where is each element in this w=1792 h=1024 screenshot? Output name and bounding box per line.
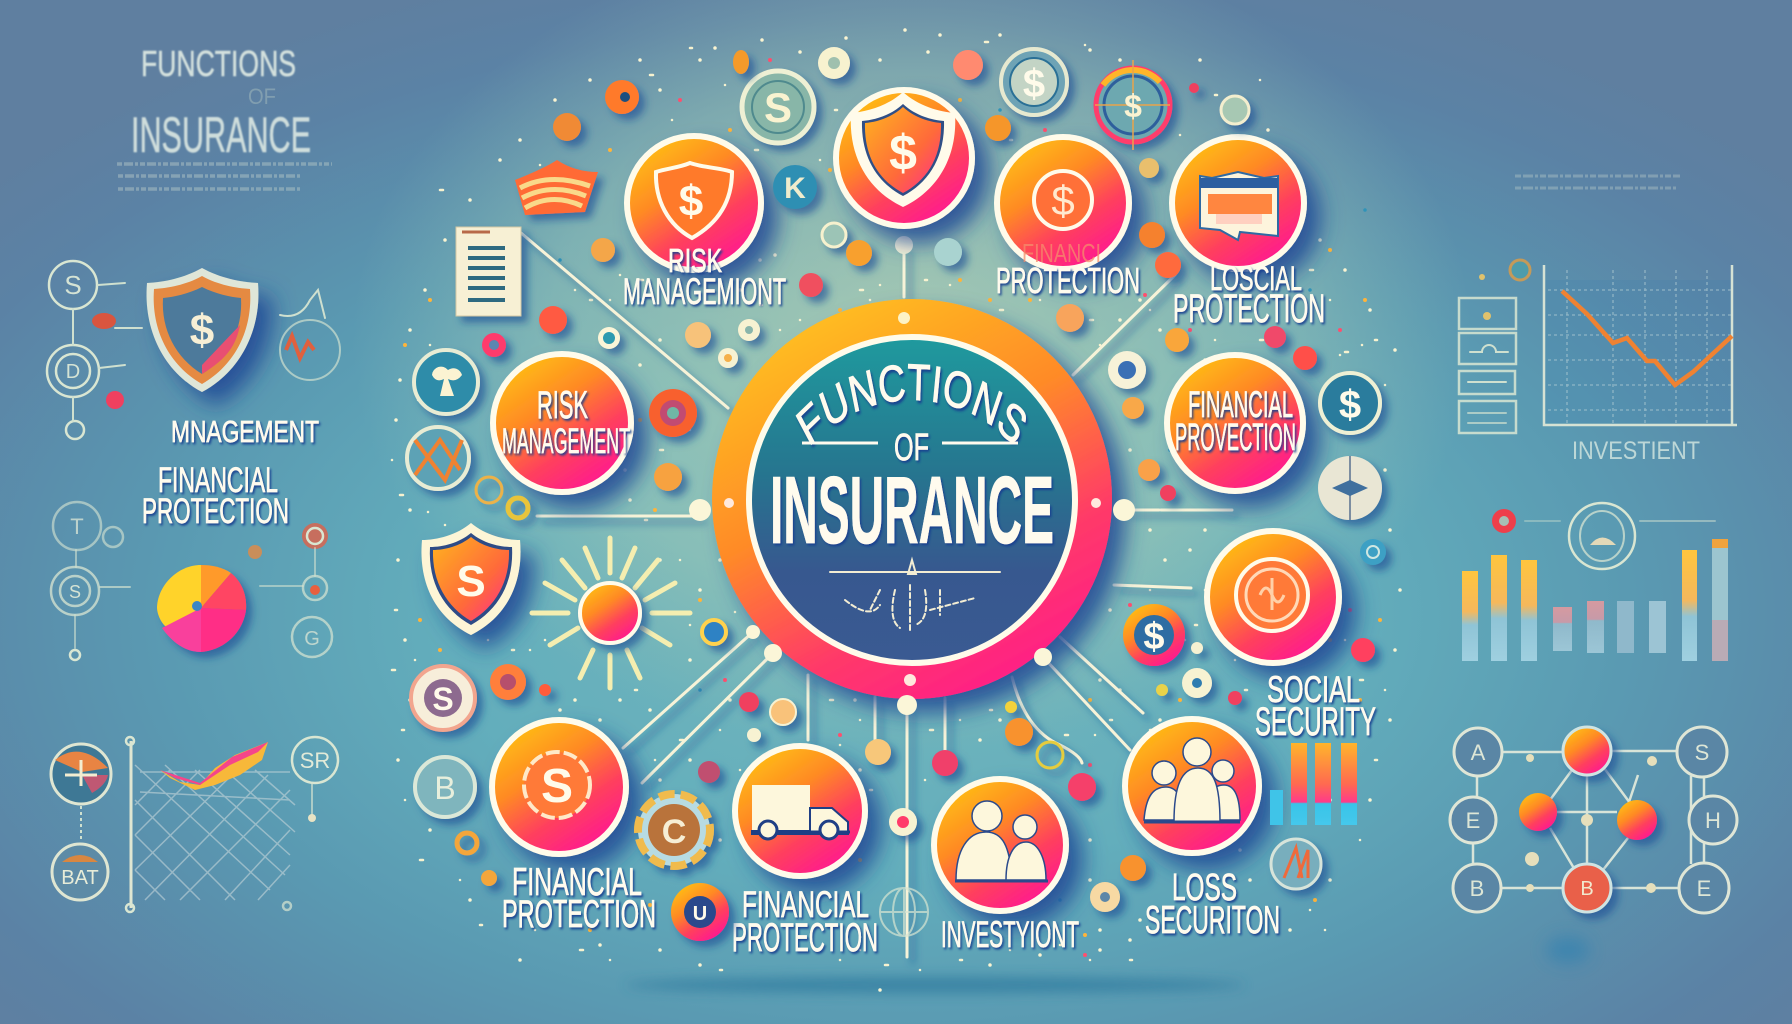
- panel: right sidebar: [1450, 176, 1737, 913]
- label: social security: SECURITY: [1255, 700, 1376, 744]
- net chart diagram: [51, 737, 338, 912]
- icon: shield: [147, 268, 258, 392]
- left faded caption: [117, 164, 332, 189]
- icon: three people: [1144, 738, 1240, 822]
- icon: shield: $: [889, 125, 917, 181]
- left label: financial protection: FINANCIAL: [158, 461, 278, 500]
- coin: teal cross: K: [784, 172, 806, 205]
- coin: target: [1095, 60, 1170, 150]
- network diagram: H: [1705, 808, 1721, 833]
- pie chart: [157, 565, 246, 652]
- icon: shield: $: [190, 306, 214, 355]
- icon: shield dollar: [656, 163, 732, 238]
- function circle: social protection top: [1172, 137, 1325, 331]
- label: financial protection lower-left: [502, 861, 656, 936]
- right faded caption: [1515, 176, 1680, 188]
- mini bar chart: [1270, 743, 1357, 825]
- network diagram: A: [1471, 740, 1486, 765]
- label: financial protection lower-middle: FINANCIAL: [742, 884, 869, 925]
- left label: financial protection: PROTECTION: [142, 492, 289, 531]
- label: PROTECTION: [996, 260, 1140, 301]
- central badge: INSURANCE: [770, 457, 1054, 564]
- title: functions: FUNCTIONS: [796, 364, 1029, 448]
- label: loss security: SECURITON: [1145, 899, 1280, 942]
- coin: clover: [414, 350, 478, 414]
- label: [996, 238, 1140, 301]
- icon: dollar coin: [1034, 171, 1092, 229]
- bar chart: [1462, 503, 1728, 661]
- coin: pink ring: [671, 883, 729, 941]
- label: RISK: [537, 384, 588, 427]
- function circle: risk management top: [623, 136, 786, 312]
- network diagram: [1450, 727, 1737, 913]
- function circle: financial protection lower-left: [492, 720, 626, 854]
- label: financial protection lower-left: PROTECTION: [502, 893, 656, 936]
- icon: left shield: S: [456, 557, 486, 606]
- network diagram: E: [1466, 808, 1480, 833]
- left label: financial protection: [142, 461, 289, 531]
- icon: gear: [638, 794, 710, 866]
- financial protection diagram: G: [304, 628, 320, 650]
- coin: pink ring: U: [693, 903, 707, 925]
- coin: chart ring: [407, 427, 469, 489]
- label: FINANCI: [1022, 238, 1101, 268]
- network diagram: B: [1470, 876, 1484, 901]
- label: loss security: [1145, 867, 1280, 942]
- label: RISK: [668, 242, 722, 279]
- management diagram: [47, 261, 340, 439]
- left heading: FUNCTIONS: [141, 43, 296, 84]
- icon: banner: [1200, 172, 1278, 240]
- coin: glassy A: [1271, 839, 1321, 889]
- icon: document: [456, 227, 521, 316]
- label: investment: INVESTYIONT: [941, 914, 1079, 955]
- coin: mid dollar: $: [1143, 616, 1165, 658]
- connector lines: [521, 233, 1232, 957]
- icon: gear: C: [662, 813, 686, 851]
- label: MANAGEMIONT: [623, 271, 786, 312]
- label: financial protection lower-middle: [732, 884, 878, 960]
- label: social security: SOCIAL: [1267, 669, 1360, 710]
- coin: right dollar: $: [1339, 383, 1361, 427]
- label: LOSCIAL: [1210, 260, 1302, 298]
- function circle: people: [934, 779, 1066, 911]
- network diagram: E: [1697, 876, 1711, 901]
- label: loss security: LOSS: [1172, 867, 1237, 909]
- label: [1175, 384, 1296, 459]
- inner disc: [749, 337, 1075, 663]
- network diagram: B: [1580, 878, 1594, 900]
- function circle: protection top: [996, 137, 1140, 301]
- coin: glass B: [415, 757, 475, 817]
- function circle: risk management left: [493, 354, 631, 492]
- label: PROTECTION: [1173, 287, 1325, 331]
- small coin icons: [407, 49, 1382, 941]
- label: [623, 242, 786, 312]
- label: social security: [1255, 669, 1376, 744]
- label: FINANCIAL: [1188, 384, 1293, 425]
- financial protection diagram: S: [69, 582, 81, 602]
- net chart diagram: SR: [300, 748, 330, 773]
- left heading: OF: [248, 84, 276, 109]
- management diagram: D: [66, 361, 80, 383]
- icon: layered hat: [515, 160, 598, 215]
- network diagram: S: [1695, 740, 1709, 765]
- icon: shield dollar: $: [679, 177, 703, 226]
- scattered confetti specks: [392, 30, 1400, 990]
- financial protection diagram: [51, 502, 332, 660]
- icon: dollar coin: $: [1051, 177, 1075, 224]
- icon: sun: [532, 538, 690, 688]
- line-art chart circle: [280, 290, 340, 380]
- icon: target swirl: [1236, 559, 1308, 631]
- coin: left S: S: [432, 681, 454, 717]
- icon: dollar badge: S: [541, 760, 573, 813]
- label: investment: INVESTIENT: [1572, 437, 1700, 465]
- panel: left sidebar: [47, 43, 340, 912]
- function circle: financial protection right: [1167, 355, 1303, 491]
- line chart: [1544, 265, 1737, 425]
- left heading: [131, 43, 311, 163]
- outer ring: [712, 299, 1112, 699]
- function circle: group: [1125, 719, 1259, 853]
- coin: glass B: B: [434, 770, 456, 806]
- coin: compass: [1318, 456, 1382, 520]
- financial protection diagram: T: [70, 514, 84, 539]
- icon: form boxes: [1459, 260, 1530, 433]
- coin: left S: [411, 666, 475, 730]
- coin: top right dollar: $: [1023, 62, 1045, 106]
- coin: right dollar: [1320, 373, 1380, 433]
- label: [1173, 260, 1325, 331]
- coin: teal cross: [773, 165, 817, 209]
- small decorative balls: [457, 47, 1386, 912]
- management diagram: S: [64, 270, 82, 300]
- emblem: [830, 560, 1000, 630]
- label: financial protection lower-middle: PROTECTION: [732, 916, 878, 960]
- central badge: [689, 236, 1144, 731]
- icon: left shield: [421, 523, 521, 635]
- left heading: INSURANCE: [131, 107, 311, 163]
- coin: top dollar: S: [764, 84, 792, 131]
- net chart diagram: BAT: [61, 867, 99, 889]
- function circle: truck: [735, 746, 865, 876]
- function circle: financial protection right: PROVECTION: [1175, 417, 1296, 459]
- title: of: OF: [894, 427, 929, 469]
- icon: truck: [752, 785, 850, 839]
- function circle: shield: [836, 90, 972, 226]
- left label: management: MNAGEMENT: [171, 414, 319, 449]
- coin: target: $: [1124, 88, 1142, 124]
- icon: two people: [956, 801, 1046, 880]
- coin: top dollar: [742, 71, 814, 143]
- icon: globe: [880, 888, 928, 936]
- function circle: social security: [1207, 531, 1339, 663]
- label: MANAGEMENT: [502, 422, 630, 461]
- label: financial protection lower-left: FINANCIAL: [512, 861, 642, 904]
- coin: top right dollar: [1001, 49, 1067, 115]
- label: [502, 384, 630, 461]
- coin: mid dollar: [1123, 604, 1185, 666]
